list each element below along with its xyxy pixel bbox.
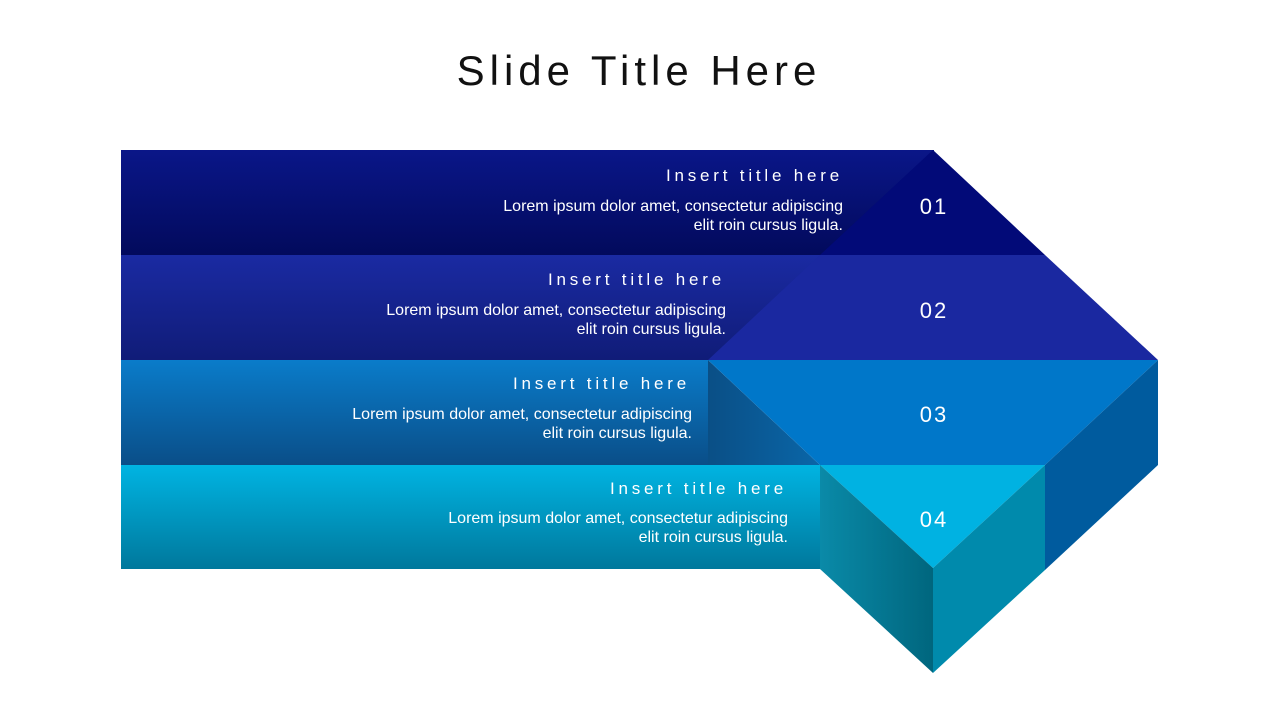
row 4 text: elit roin cursus ligula. bbox=[639, 529, 788, 546]
row 1 text: elit roin cursus ligula. bbox=[694, 217, 843, 234]
row 4 text: Lorem ipsum dolor amet, consectetur adipiscing bbox=[448, 510, 788, 527]
row 1 text: Insert title here bbox=[666, 166, 843, 185]
row 2 text: Lorem ipsum dolor amet, consectetur adipiscing bbox=[386, 302, 726, 319]
row 3 text: Insert title here bbox=[513, 374, 690, 393]
row 4 bbox=[121, 465, 1045, 569]
number 01: 01 bbox=[920, 194, 948, 219]
row 4 text bbox=[448, 479, 788, 546]
row 3 text bbox=[352, 374, 692, 442]
diamond extrusion faces bbox=[820, 360, 1158, 673]
row 4 text: Insert title here bbox=[610, 479, 787, 498]
row 3 bbox=[121, 360, 1158, 465]
number 04: 04 bbox=[920, 507, 948, 532]
row 2 bbox=[121, 255, 1158, 360]
row 1 bbox=[121, 150, 1045, 255]
row 3 text: Lorem ipsum dolor amet, consectetur adipiscing bbox=[352, 406, 692, 423]
title: Slide Title Here bbox=[457, 47, 821, 94]
row 1 text bbox=[503, 166, 843, 234]
row 2 text: Insert title here bbox=[548, 270, 725, 289]
number 02: 02 bbox=[920, 298, 948, 323]
row 1 text: Lorem ipsum dolor amet, consectetur adipiscing bbox=[503, 198, 843, 215]
row 2 text bbox=[386, 270, 726, 338]
row 3 text: elit roin cursus ligula. bbox=[543, 425, 692, 442]
number 03: 03 bbox=[920, 402, 948, 427]
row 2 text: elit roin cursus ligula. bbox=[577, 321, 726, 338]
